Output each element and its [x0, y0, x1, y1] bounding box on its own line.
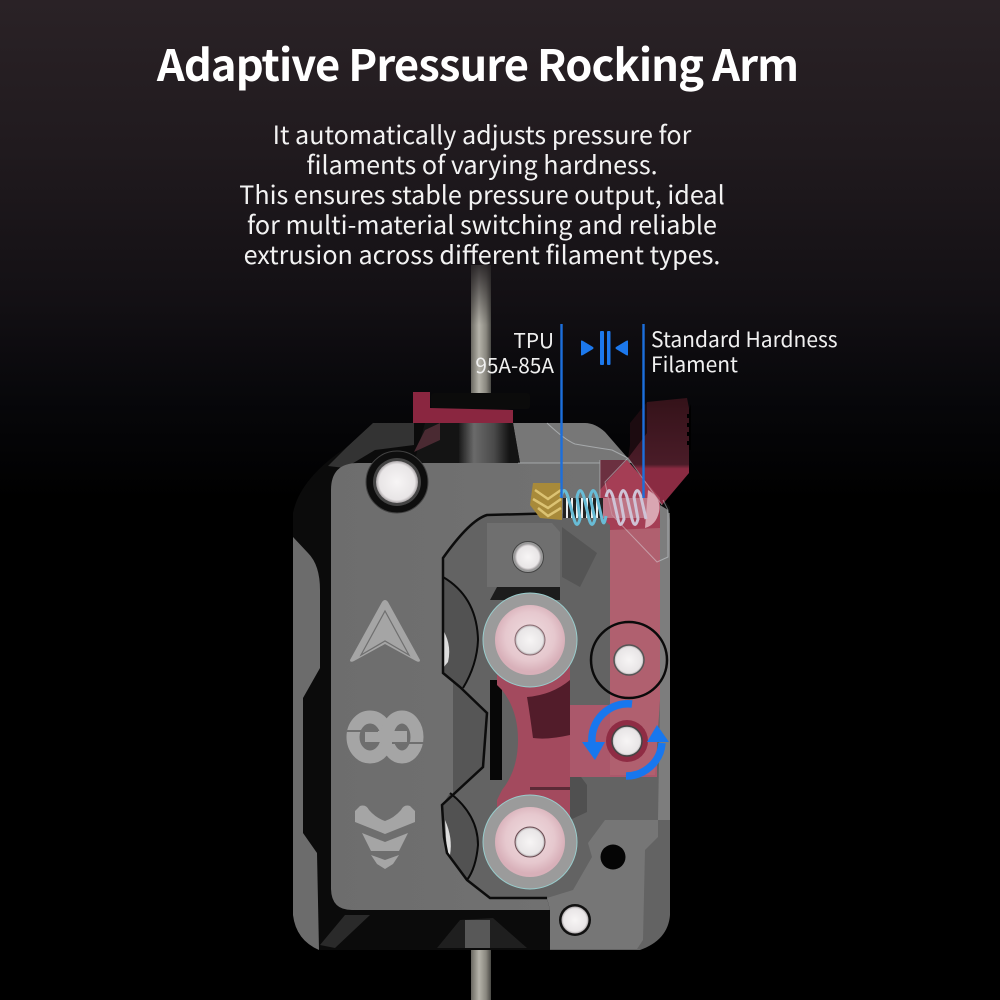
arm top red block: [600, 460, 660, 530]
pale outlines: [518, 423, 668, 562]
window black outline: [442, 513, 562, 898]
title: Adaptive Pressure Rocking Arm: [157, 31, 798, 94]
lower right lighter block: [547, 820, 658, 949]
filament top: [471, 265, 491, 395]
label: TPU: [475, 324, 554, 379]
description text: It automatically adjusts pressure for: [273, 116, 691, 152]
logo: chevrons: [355, 806, 415, 869]
lever teeth: [687, 404, 691, 450]
top left highlight: [328, 423, 414, 468]
brass gear: [530, 483, 562, 520]
logo: interlocked ae mark: [346, 717, 425, 757]
upper roller: [483, 593, 577, 687]
upper cutout lobe: [443, 577, 478, 688]
lever dark upper: [628, 398, 689, 505]
dark band along zigzag: [453, 672, 487, 795]
screw top left: [366, 451, 428, 513]
square pink pivot panel: [570, 705, 657, 777]
lower left highlight: [320, 915, 370, 948]
blue limit lines: [562, 324, 644, 498]
screw bottom right: [559, 904, 591, 936]
link arm shadow: [527, 680, 570, 739]
label: standard hardness filament: Filament: [651, 349, 738, 379]
blue rotation arrows: [582, 704, 669, 776]
black hole: [600, 844, 626, 870]
arm top shadow: [600, 460, 627, 490]
description text: This ensures stable pressure output, ideal: [239, 176, 725, 212]
arm pin: [614, 645, 644, 675]
lower cutout lobe: [442, 793, 478, 880]
squeeze icon: [581, 331, 628, 365]
left gray side strip: [293, 537, 320, 950]
dark band under bracket: [490, 587, 560, 600]
dark diamond right of link: [570, 762, 587, 820]
top right gray shoulder: [513, 423, 632, 463]
description text: for multi-material switching and reliable: [247, 206, 717, 242]
black bar beside link: [490, 680, 502, 780]
bracket pin: [512, 542, 544, 572]
extruder body: [293, 423, 670, 950]
spring: [561, 490, 660, 528]
lower roller: [483, 795, 577, 889]
black ring around arm pin: [591, 622, 667, 698]
label: TPU: TPU: [513, 324, 554, 354]
long red rocker arm: [610, 510, 660, 775]
label: standard hardness filament: [651, 324, 838, 379]
label: TPU: 95A-85A: [475, 349, 554, 379]
red clip on top: [413, 392, 513, 423]
right body sliver: [658, 505, 670, 820]
red link arm: [497, 630, 570, 840]
description text: [239, 116, 725, 272]
link arm lower shade: [530, 787, 570, 790]
pivot pin: [606, 720, 648, 762]
window base and right body: [443, 513, 670, 950]
top collar and cylinder: [414, 423, 520, 463]
bottom filament collar: [437, 918, 527, 948]
label: standard hardness filament: Standard Hardness: [651, 324, 838, 354]
dark wedge block: [562, 527, 597, 587]
main front plate: [331, 463, 600, 910]
description text: extrusion across different filament types.: [244, 236, 720, 272]
description text: filaments of varying hardness.: [306, 146, 658, 182]
lever translucent back: [628, 402, 647, 458]
black retaining disc: [431, 393, 530, 409]
logo: triangle: [350, 600, 420, 662]
filament bottom: [471, 945, 491, 1000]
upper pin bracket: [487, 523, 560, 587]
